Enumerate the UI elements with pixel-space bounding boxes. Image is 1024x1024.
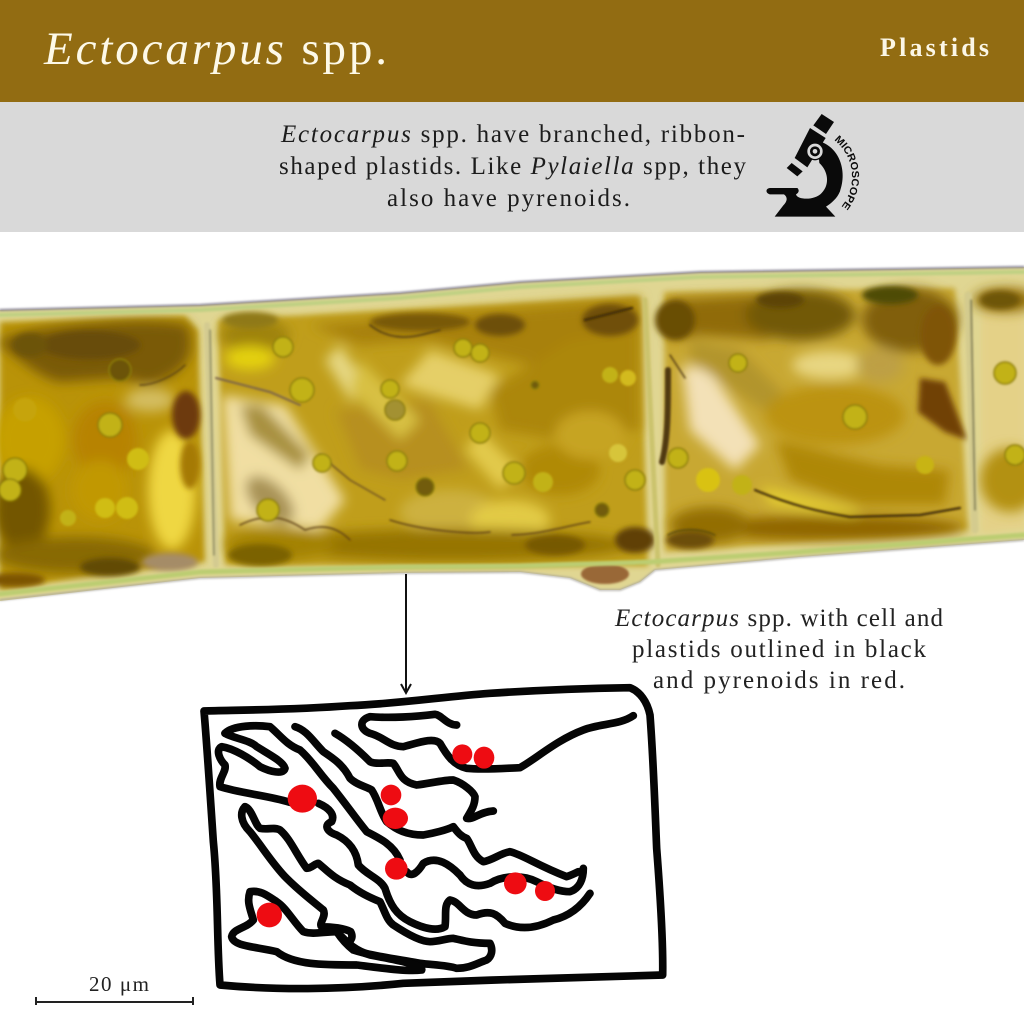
plastid: bottom left	[232, 891, 422, 970]
diagram: cell and plastid outline	[204, 688, 663, 989]
scale bar	[36, 972, 193, 1005]
plastid: lower long branch	[242, 807, 352, 942]
plastid: upper left branch	[225, 726, 400, 860]
section label: Plastids: Plastids	[880, 33, 989, 62]
plastid: central branch	[335, 733, 493, 819]
intro text: also have pyrenoids.	[387, 185, 630, 212]
cell interiors	[0, 285, 1024, 590]
caption: Ectocarpus spp. with cell and	[614, 605, 944, 632]
micrograph: Ectocarpus filament	[0, 260, 1024, 605]
intro panel	[0, 102, 1024, 232]
filament cell wall outline	[0, 267, 1024, 600]
intro text: Ectocarpus spp. have branched, ribbon-	[280, 121, 745, 148]
title: Ectocarpus spp.	[43, 23, 387, 75]
icon: microscope: MICROSCOPE	[834, 135, 860, 210]
icon: microscope	[766, 114, 860, 217]
cell outline	[204, 688, 663, 989]
pyrenoids	[257, 744, 555, 927]
plastid: middle branch	[295, 727, 578, 877]
plastid: top right	[362, 714, 633, 769]
intro text: shaped plastids. Like Pylaiella spp, they	[279, 153, 746, 180]
caption	[614, 605, 944, 694]
arrow: photo to drawing	[401, 574, 411, 693]
header bar	[0, 0, 1024, 102]
caption: plastids outlined in black	[632, 636, 926, 663]
intro text	[279, 121, 746, 212]
caption: and pyrenoids in red.	[653, 667, 905, 694]
scale bar: 20 μm	[89, 972, 149, 996]
